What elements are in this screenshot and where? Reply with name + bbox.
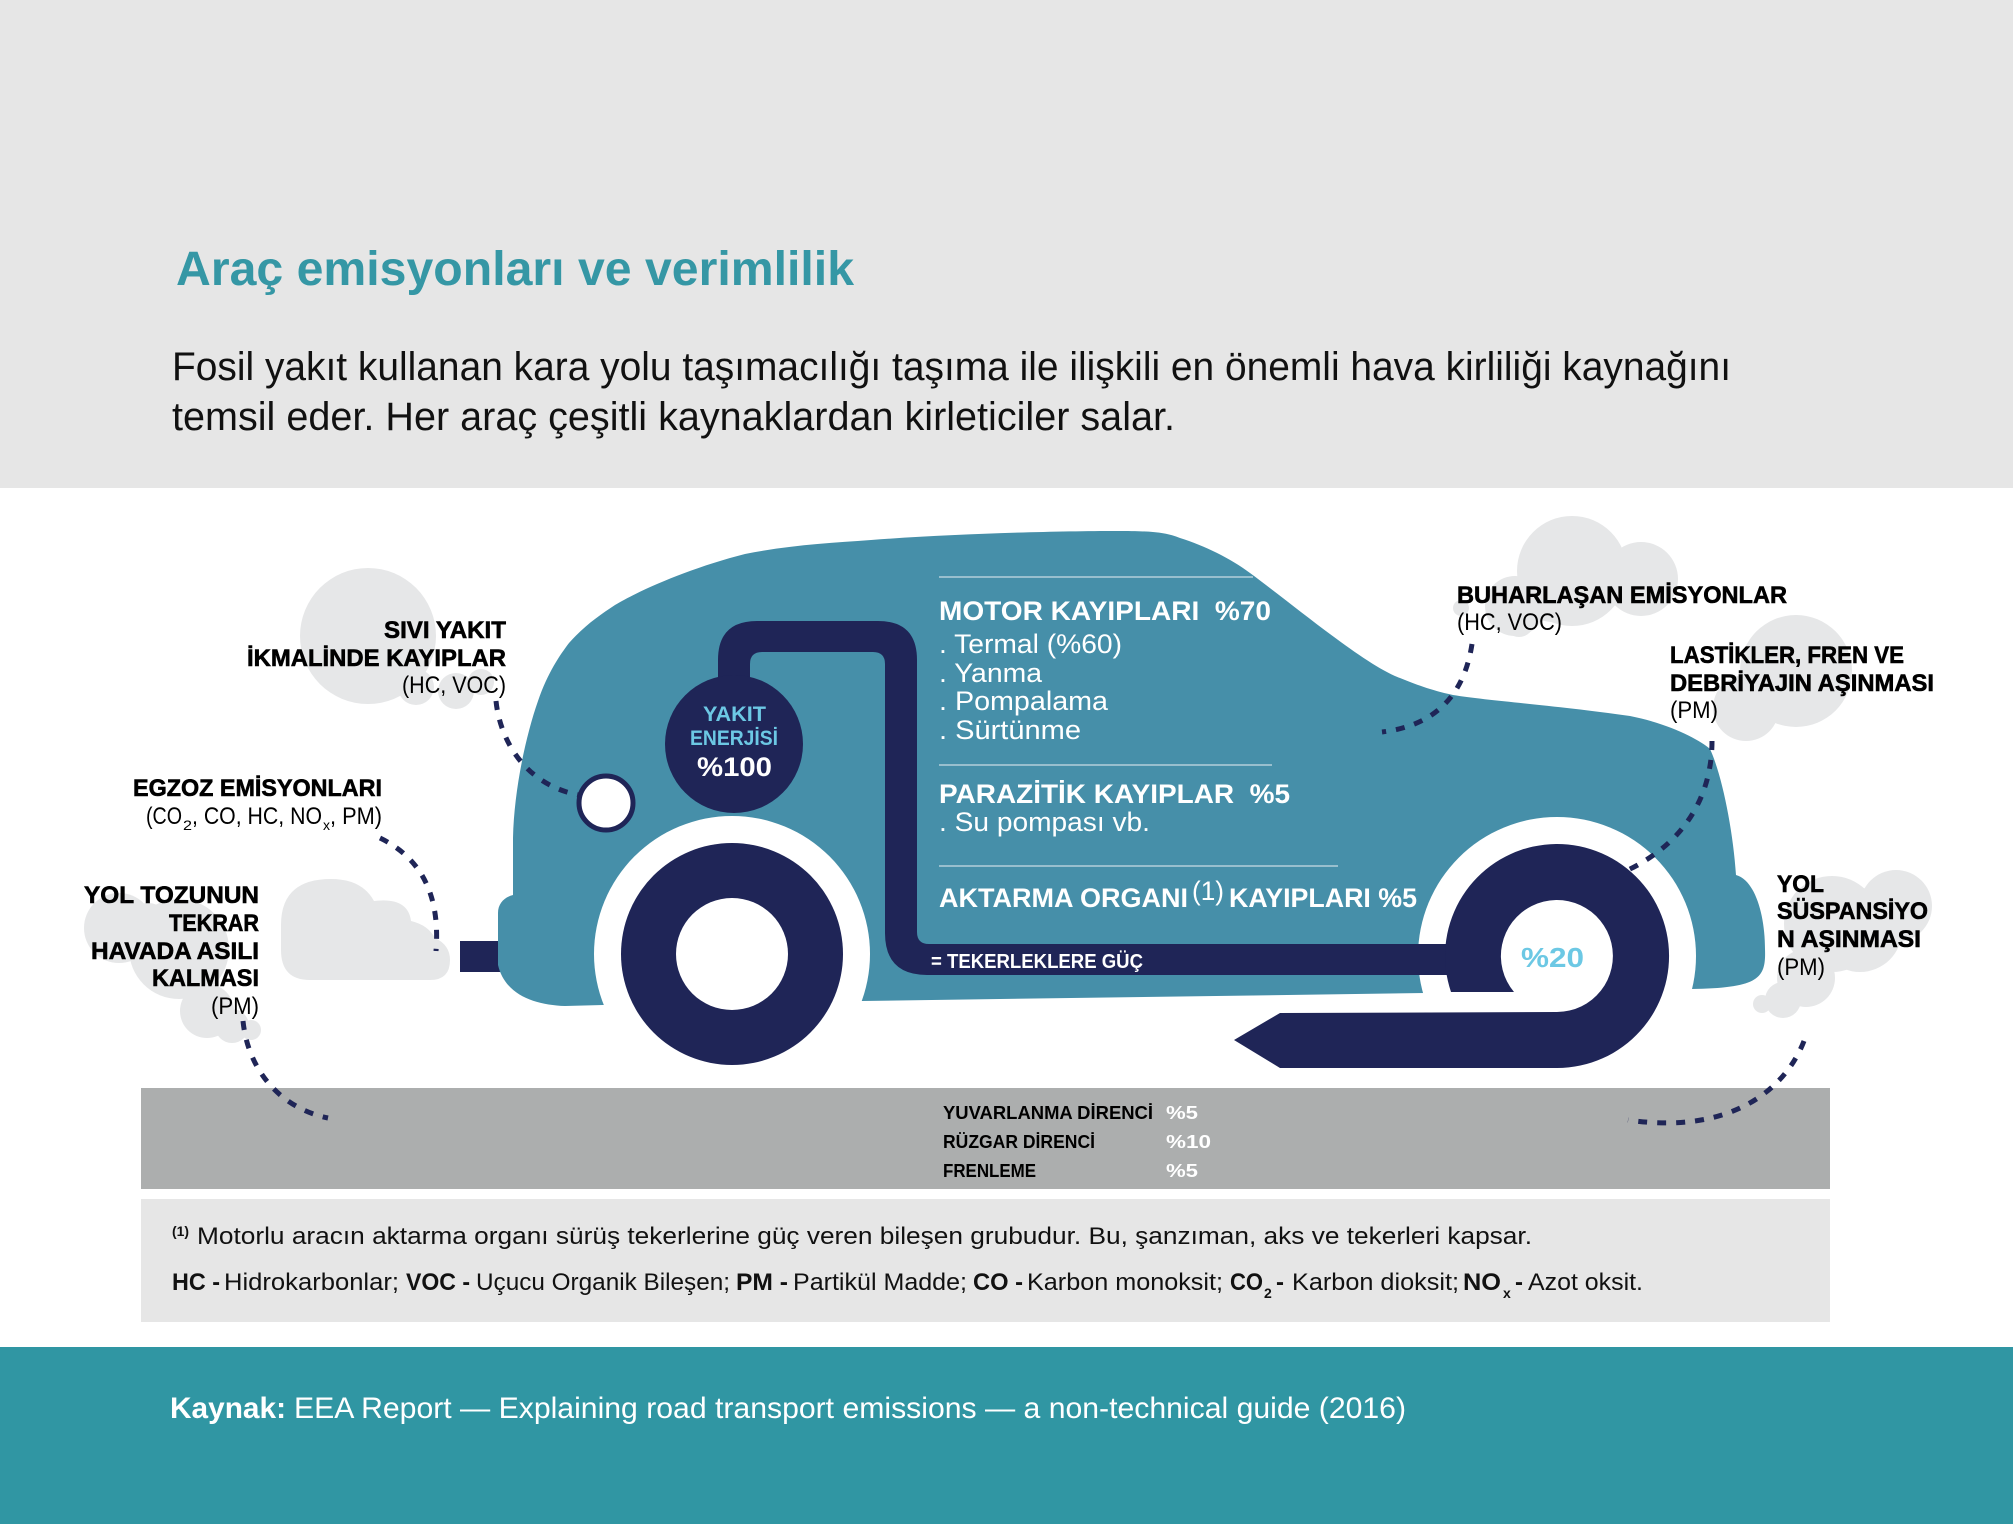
resistance table: %5	[1166, 1103, 1198, 1123]
abbreviations: VOC -	[406, 1269, 470, 1296]
dashed leader: exhaust	[380, 838, 437, 951]
parasitic losses: . Su pompası vb.	[939, 807, 1150, 837]
rear wheel percent: %20	[1521, 942, 1584, 973]
power to wheels label: = TEKERLEKLERE GÜÇ	[931, 950, 1143, 973]
label: tyres, brakes, clutch wear	[1670, 642, 1934, 724]
label: refuelling losses: İKMALİNDE KAYIPLAR	[247, 645, 506, 672]
abbreviations: Azot oksit.	[1528, 1269, 1643, 1296]
label: evaporative emissions: (HC, VOC)	[1457, 609, 1562, 636]
fuel energy circle: %100	[697, 752, 772, 782]
label: exhaust emissions	[133, 775, 382, 833]
wheel arch: front	[594, 816, 870, 1092]
label: road dust: KALMASI	[152, 965, 259, 992]
label: refuelling losses: SIVI YAKIT	[384, 617, 506, 644]
label: road dust	[84, 882, 259, 1020]
dashed leader: suspension	[1628, 1041, 1804, 1123]
label: exhaust emissions: , PM)	[330, 803, 382, 830]
abbreviations: -	[1276, 1269, 1284, 1296]
header band	[0, 0, 2013, 488]
fuel energy circle	[665, 675, 803, 813]
engine losses: . Yanma	[939, 658, 1043, 688]
notes panel	[141, 1199, 1830, 1322]
dashed leader: tyres	[1628, 741, 1712, 870]
label: tyres, brakes, clutch wear: (PM)	[1670, 697, 1718, 724]
cloud: tyres and brakes	[1713, 615, 1852, 741]
label: refuelling losses: (HC, VOC)	[402, 672, 506, 699]
footer band	[0, 1347, 2013, 1524]
fuel energy circle: ENERJİSİ	[690, 727, 778, 750]
abbreviations: Uçucu Organik Bileşen;	[476, 1269, 730, 1296]
label: exhaust emissions: x	[323, 817, 330, 833]
footnote: (1)	[172, 1223, 189, 1239]
engine losses: . Pompalama	[939, 686, 1109, 716]
label: tyres, brakes, clutch wear: DEBRİYAJIN AŞINMASI	[1670, 670, 1934, 697]
cloud: road dust	[84, 893, 261, 1043]
resistance table: YUVARLANMA DİRENCİ	[943, 1103, 1153, 1123]
label: tyres, brakes, clutch wear: LASTİKLER, FREN VE	[1670, 642, 1904, 669]
cloud: suspension	[1753, 870, 1932, 1018]
resistance table: FRENLEME	[943, 1161, 1036, 1181]
abbreviations: Hidrokarbonlar;	[224, 1269, 399, 1296]
resistance table: RÜZGAR DİRENCİ	[943, 1132, 1095, 1152]
label: exhaust emissions: , CO, HC, NO	[192, 803, 322, 830]
energy flow band	[718, 621, 1465, 975]
dashed leader: evaporative	[1382, 644, 1472, 732]
abbreviations: -	[1515, 1269, 1523, 1296]
engine losses: . Sürtünme	[939, 715, 1081, 745]
source text: Kaynak:	[170, 1392, 286, 1425]
label: road dust: (PM)	[211, 993, 259, 1020]
abbreviations	[172, 1269, 1643, 1301]
abbreviations: CO	[1230, 1269, 1263, 1296]
dashed leader: refuelling	[496, 701, 579, 795]
engine losses: . Termal (%60)	[939, 629, 1122, 659]
parasitic losses	[939, 779, 1290, 837]
cloud: refuelling	[300, 568, 494, 709]
label: exhaust emissions: 2	[183, 817, 192, 833]
fuel energy circle: YAKIT	[703, 703, 766, 726]
abbreviations: x	[1503, 1285, 1511, 1301]
wheel arch: rear	[1418, 817, 1696, 1095]
intro text	[172, 345, 1731, 439]
drivetrain losses: (1)	[1192, 876, 1224, 906]
divider rules	[939, 577, 1338, 866]
cloud: evaporative	[1453, 516, 1678, 637]
abbreviations: CO -	[973, 1269, 1023, 1296]
label: exhaust emissions: (CO	[146, 803, 182, 830]
resistance table: %5	[1166, 1161, 1198, 1181]
abbreviations: Karbon monoksit;	[1027, 1269, 1223, 1296]
title: Araç emisyonları ve verimlilik	[176, 243, 854, 296]
drivetrain losses	[939, 876, 1417, 913]
label: evaporative emissions	[1457, 582, 1787, 636]
label: suspension wear: YOL	[1777, 871, 1824, 898]
abbreviations: NO	[1463, 1269, 1501, 1296]
road band	[141, 1088, 1830, 1189]
engine losses	[939, 596, 1271, 745]
dashed leader: road dust	[243, 1021, 328, 1118]
label: suspension wear: (PM)	[1777, 954, 1825, 981]
parasitic losses: PARAZİTİK KAYIPLAR %5	[939, 779, 1290, 809]
label: evaporative emissions: BUHARLAŞAN EMİSYONLAR	[1457, 582, 1787, 609]
abbreviations: HC -	[172, 1269, 220, 1296]
label: suspension wear	[1777, 871, 1928, 981]
abbreviations: Karbon dioksit;	[1292, 1269, 1459, 1296]
label: suspension wear: N AŞINMASI	[1777, 926, 1921, 953]
footnote: Motorlu aracın aktarma organı sürüş tekerlerine güç veren bileşen grubudur. Bu, şanzıman, aks ve tekerleri kapsar.	[197, 1223, 1532, 1250]
exhaust pipe	[460, 941, 502, 972]
abbreviations: 2	[1264, 1285, 1272, 1301]
resistance table	[943, 1103, 1211, 1181]
abbreviations: Partikül Madde;	[793, 1269, 967, 1296]
front wheel	[621, 843, 843, 1065]
drivetrain losses: KAYIPLARI %5	[1229, 883, 1417, 913]
engine losses: MOTOR KAYIPLARI %70	[939, 596, 1271, 626]
fuel cap	[579, 776, 633, 830]
label: suspension wear: SÜSPANSİYO	[1777, 898, 1928, 925]
label: road dust: YOL TOZUNUN	[84, 882, 259, 909]
label: road dust: TEKRAR	[169, 910, 259, 937]
intro text: temsil eder. Her araç çeşitli kaynaklardan kirleticiler salar.	[172, 395, 1175, 439]
abbreviations: PM -	[736, 1269, 788, 1296]
label: road dust: HAVADA ASILI	[91, 938, 259, 965]
source text: EEA Report — Explaining road transport emissions — a non-technical guide (2016)	[294, 1392, 1406, 1425]
label: exhaust emissions: EGZOZ EMİSYONLARI	[133, 775, 382, 802]
intro text: Fosil yakıt kullanan kara yolu taşımacılığı taşıma ile ilişkili en önemli hava kirliliği kaynağını	[172, 345, 1731, 389]
resistance table: %10	[1166, 1132, 1211, 1152]
rear wheel spiral arrow	[1234, 844, 1669, 1068]
car body	[498, 531, 1765, 1006]
cloud: exhaust	[281, 879, 450, 980]
label: refuelling losses	[247, 617, 506, 699]
drivetrain losses: AKTARMA ORGANI	[939, 883, 1188, 913]
